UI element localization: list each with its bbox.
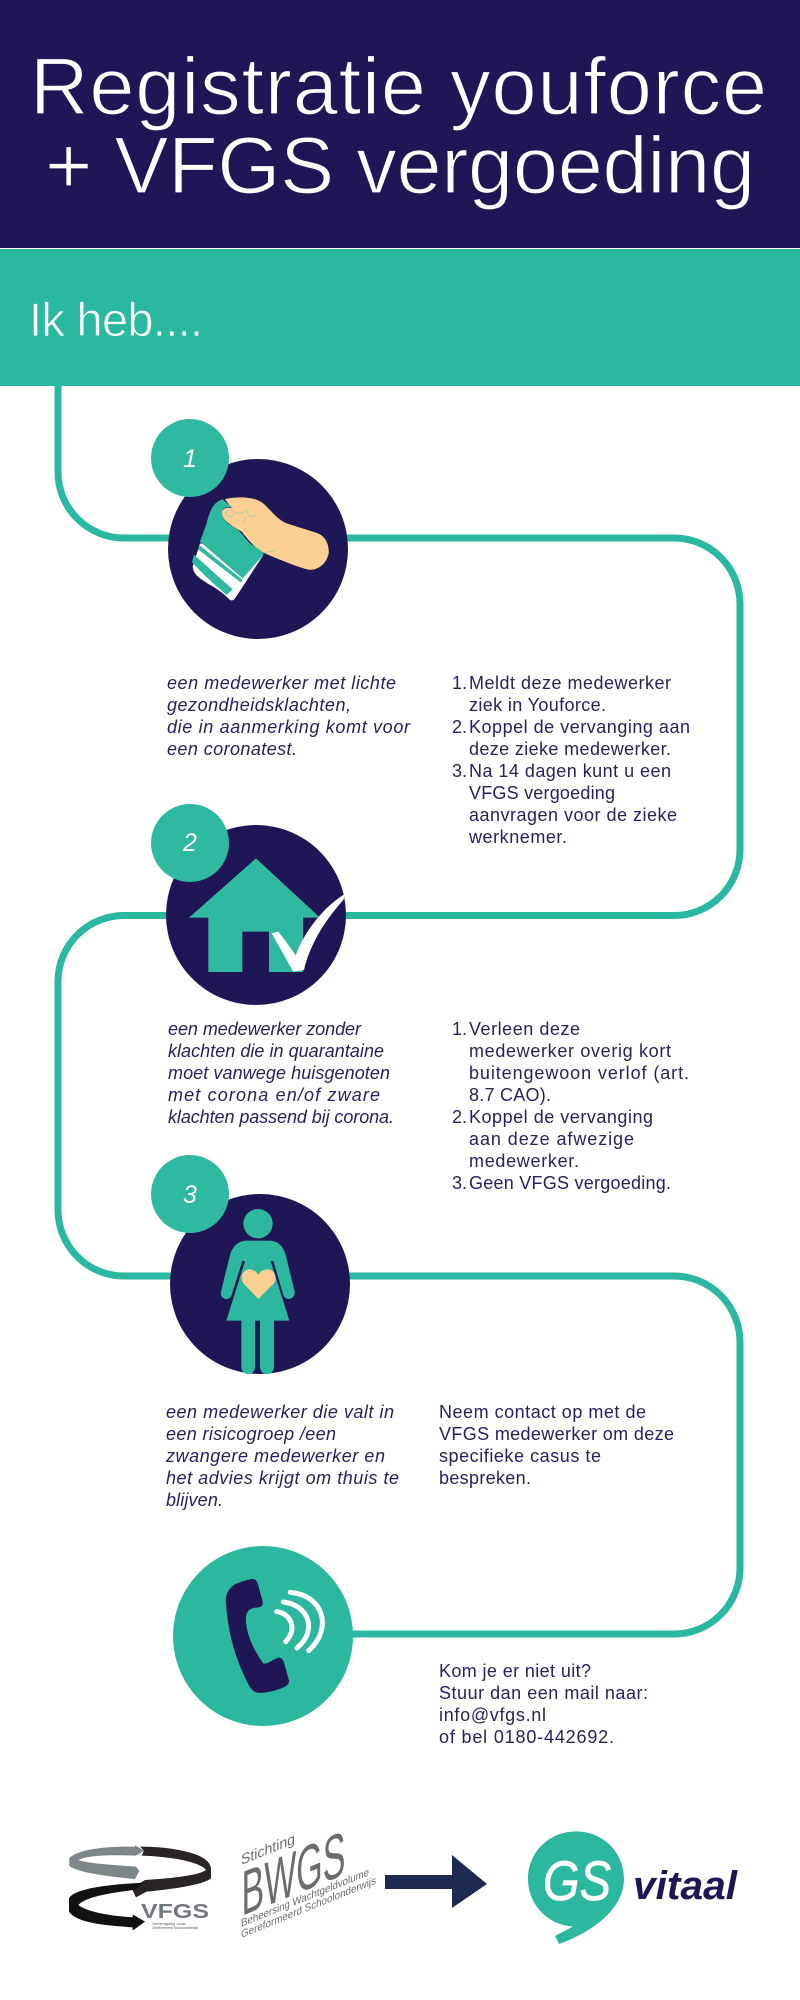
badge 2: 2 bbox=[182, 829, 197, 857]
badge 2 bbox=[151, 804, 229, 882]
text: case 2 steps: Koppel de vervanging bbox=[469, 1107, 653, 1127]
text: case 1 description: die in aanmerking komt voor bbox=[167, 717, 411, 737]
text: case 1 description: een coronatest. bbox=[167, 739, 297, 759]
badge 1: 1 bbox=[183, 445, 197, 473]
text: contact info: of bel 0180-442692. bbox=[439, 1727, 614, 1747]
logo: GS vitaal: vitaal bbox=[633, 1864, 738, 1908]
subheading band bbox=[0, 249, 800, 386]
text: case 1 steps: werknemer. bbox=[468, 827, 567, 847]
text: case 3 action: specifieke casus te bbox=[439, 1446, 601, 1466]
text: case 2 steps: 8.7 CAO). bbox=[469, 1085, 551, 1105]
text: case 1 steps: 3. bbox=[452, 761, 467, 781]
text: case 3 description: het advies krijgt om thuis te bbox=[166, 1468, 399, 1488]
text: case 2 description: een medewerker zonder bbox=[168, 1019, 362, 1039]
text: case 2 steps: aan deze afwezige bbox=[469, 1129, 634, 1149]
text: contact info bbox=[439, 1661, 648, 1747]
badge 3: 3 bbox=[183, 1181, 197, 1209]
text: case 2 steps: Geen VFGS vergoeding. bbox=[469, 1173, 671, 1193]
text: case 2 description: moet vanwege huisgenoten bbox=[168, 1063, 390, 1083]
title bbox=[30, 42, 767, 211]
text: case 1 steps: 2. bbox=[452, 717, 467, 737]
text: case 2 steps: buitengewoon verlof (art. bbox=[469, 1063, 689, 1083]
text: case 1 steps: Meldt deze medewerker bbox=[469, 673, 671, 693]
text: case 3 action: Neem contact op met de bbox=[439, 1402, 646, 1422]
text: case 3 action: bespreken. bbox=[439, 1468, 531, 1488]
text: case 3 description: zwangere medewerker en bbox=[165, 1446, 385, 1466]
text: case 1 steps: Na 14 dagen kunt u een bbox=[469, 761, 671, 781]
text: case 1 description: een medewerker met lichte bbox=[167, 673, 396, 693]
logo: Stichting BWGS: Beheersing Wachtgeldvolume bbox=[241, 1867, 369, 1930]
text: contact info: Kom je er niet uit? bbox=[439, 1661, 591, 1681]
connecting path bbox=[58, 386, 740, 1634]
text: contact info: Stuur dan een mail naar: bbox=[439, 1683, 648, 1703]
text: case 1 steps: deze zieke medewerker. bbox=[469, 739, 671, 759]
text: case 3 action: VFGS medewerker om deze bbox=[439, 1424, 674, 1444]
logo: Stichting BWGS: BWGS bbox=[242, 1817, 345, 1929]
text: case 2 steps: 3. bbox=[452, 1173, 467, 1193]
text: case 1 steps: aanvragen voor de zieke bbox=[469, 805, 677, 825]
text: case 1 description bbox=[167, 673, 411, 759]
text: case 2 steps: 2. bbox=[452, 1107, 467, 1127]
text: case 2 description: klachten die in quarantaine bbox=[168, 1041, 384, 1061]
badge 3 bbox=[151, 1155, 229, 1233]
logo: VFGS bbox=[69, 1845, 211, 1931]
logo: GS vitaal: GS bbox=[543, 1849, 611, 1912]
text: case 3 description: een risicogroep /een bbox=[166, 1424, 336, 1444]
text: case 3 description bbox=[165, 1402, 399, 1510]
text: case 1 steps: VFGS vergoeding bbox=[469, 783, 615, 803]
logo: VFGS: VFGS bbox=[141, 1901, 209, 1923]
text: case 2 steps bbox=[452, 1019, 689, 1193]
text: case 1 steps bbox=[452, 673, 690, 847]
icon: woman with heart bbox=[170, 1194, 350, 1374]
title: Registratie youforce bbox=[30, 42, 767, 132]
text: case 2 description bbox=[168, 1019, 394, 1127]
logo: Stichting BWGS bbox=[241, 1817, 376, 1941]
text: case 1 description: gezondheidsklachten, bbox=[167, 695, 351, 715]
text: case 2 description: klachten passend bij corona. bbox=[168, 1107, 394, 1127]
logo: Stichting BWGS: Stichting bbox=[241, 1831, 295, 1869]
text: case 3 description: blijven. bbox=[166, 1490, 223, 1510]
badge 1 bbox=[151, 419, 229, 497]
header banner bbox=[0, 0, 800, 248]
icon: phone bbox=[173, 1546, 353, 1726]
logo: VFGS: Gereformeerd Schoolonderwijs bbox=[152, 1925, 198, 1930]
text: case 1 steps: 1. bbox=[452, 673, 467, 693]
logo: Stichting BWGS: Gereformeerd Schoolonderwijs bbox=[241, 1875, 376, 1941]
text: case 3 description: een medewerker die valt in bbox=[166, 1402, 394, 1422]
icon: house with check bbox=[166, 825, 346, 1005]
text: case 2 steps: 1. bbox=[452, 1019, 467, 1039]
text: contact info: info@vfgs.nl bbox=[439, 1705, 546, 1725]
title: + VFGS vergoeding bbox=[45, 121, 755, 211]
subheading band: Ik heb.... bbox=[29, 293, 203, 346]
icon: hand with tissue bbox=[168, 459, 348, 639]
arrow bbox=[385, 1855, 487, 1908]
text: case 2 description: met corona en/of zware bbox=[168, 1085, 380, 1105]
logo: GS vitaal bbox=[528, 1832, 738, 1944]
text: case 3 action bbox=[439, 1402, 674, 1488]
text: case 1 steps: ziek in Youforce. bbox=[469, 695, 606, 715]
text: case 2 steps: medewerker. bbox=[469, 1151, 579, 1171]
text: case 2 steps: medewerker overig kort bbox=[469, 1041, 671, 1061]
text: case 1 steps: Koppel de vervanging aan bbox=[469, 717, 690, 737]
text: case 2 steps: Verleen deze bbox=[469, 1019, 580, 1039]
logo: VFGS: Vereniging voor bbox=[152, 1921, 187, 1926]
